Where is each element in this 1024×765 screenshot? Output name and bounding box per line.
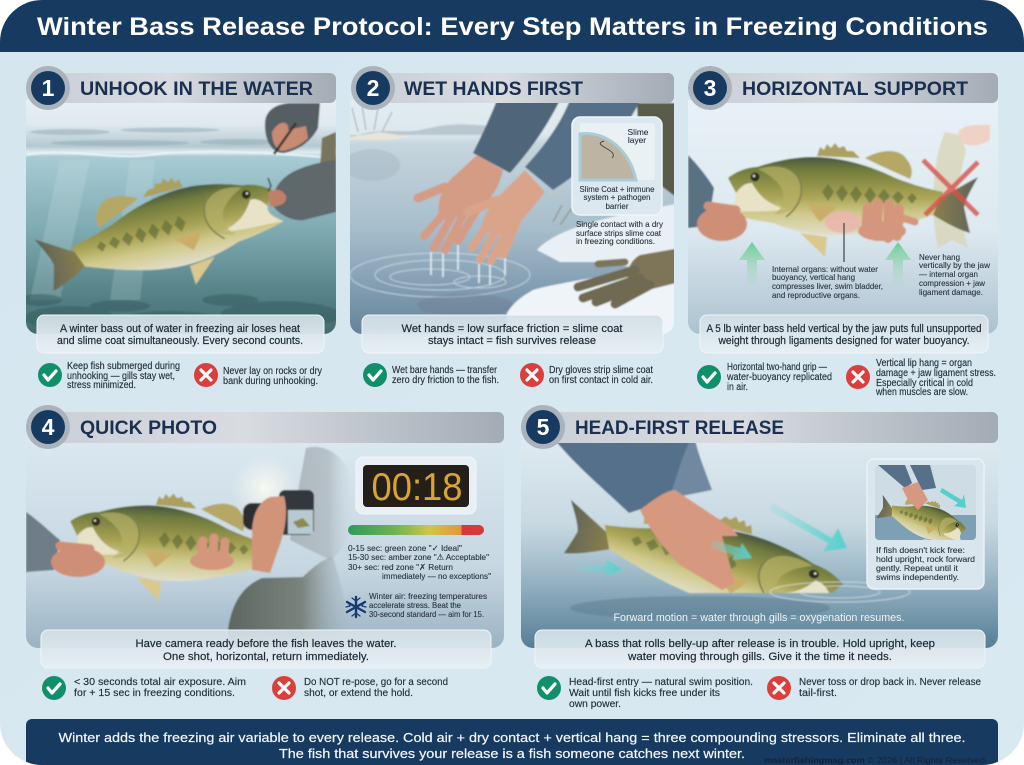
don't item [846, 358, 996, 398]
text band: and slime coat simultaneously. Every second counts. [57, 335, 303, 347]
don't item: damage + jaw ligament stress. [876, 368, 996, 379]
stress gauge bar [348, 525, 484, 535]
do item: Horizontal two-hand grip — [727, 362, 827, 373]
icon: snowflake [346, 597, 366, 617]
heading: 4 [42, 414, 55, 440]
annotation: internal organs: Internal organs: without water [772, 264, 878, 274]
inset: slime layer diagram [572, 117, 662, 215]
text band: stays intact = fish survives release [428, 335, 596, 347]
do item: Keep fish submerged during [67, 361, 180, 372]
annotation: never hang: — internal organ [919, 269, 978, 279]
text band: weight through ligaments designed for water buoyancy. [718, 335, 970, 347]
heading: WET HANDS FIRST [404, 78, 583, 100]
text band [362, 315, 663, 353]
do item: in air. [727, 382, 748, 393]
inset: if fish doesn't kick free: hold upright, rock forward [876, 554, 975, 564]
footer banner: The fish that survives your release is a fish someone catches next winter. [279, 746, 745, 761]
arrow: buoyancy support right [885, 242, 911, 287]
text band [700, 315, 988, 353]
don't item: Do NOT re-pose, go for a second [304, 677, 448, 688]
callout: dry contact: surface strips slime coat [576, 228, 662, 238]
gauge legend: immediately — no exceptions" [382, 571, 491, 581]
inset: if fish doesn't kick free [867, 459, 984, 589]
do item: for + 15 sec in freezing conditions. [74, 688, 235, 699]
do item [697, 362, 832, 393]
do item [42, 676, 246, 700]
gauge legend [348, 543, 491, 581]
do item: Head-first entry — natural swim position. [569, 677, 753, 688]
watermark: masterfishingmag.com © 2026 | All Rights Reserved [764, 755, 985, 765]
callout: dry contact: in freezing conditions. [576, 236, 655, 246]
inset: slime layer diagram: Slime [628, 127, 649, 137]
title bar [0, 0, 1024, 52]
text band: One shot, horizontal, return immediately. [163, 651, 369, 663]
annotation: never hang: ligament damage. [919, 287, 983, 297]
title bar: Winter Bass Release Protocol: Every Step Matters in Freezing Conditions [37, 13, 988, 41]
do item [38, 361, 180, 391]
annotation: never hang: compression + jaw [919, 278, 986, 288]
winter air note [369, 591, 487, 619]
do item [537, 676, 753, 710]
gauge legend: 30+ sec: red zone "✗ Return [348, 562, 453, 572]
text band [535, 630, 985, 668]
annotation: internal organs: buoyancy, vertical hang [772, 272, 855, 282]
inset: slime layer diagram: barrier [606, 201, 629, 211]
text band: water moving through gills. Give it the time it needs. [627, 651, 892, 663]
timer display [356, 457, 476, 514]
don't item: Vertical lip hang = organ [876, 358, 972, 369]
don't item [520, 363, 653, 387]
winter air note: Winter air: freezing temperatures [369, 591, 487, 601]
heading: 1 [42, 75, 55, 101]
don't item: Never toss or drop back in. Never release [799, 677, 982, 688]
don't item: Never lay on rocks or dry [223, 366, 322, 377]
inset: slime layer diagram: system + pathogen [584, 192, 651, 202]
don't item [194, 363, 322, 387]
footer banner: Winter adds the freezing air variable to every release. Cold air + dry contact + vertical hang = three compounding stressors. Eliminate all three. [58, 730, 966, 745]
annotation: internal organs [772, 264, 883, 300]
do item: Wait until fish kicks free under its [569, 688, 720, 699]
panel 2: wet hands first [344, 66, 680, 387]
don't item: when muscles are slow. [875, 387, 968, 398]
do item [363, 363, 499, 387]
gauge legend: 15-30 sec: amber zone "⚠ Acceptable" [348, 552, 489, 562]
inset: slime layer diagram: layer [628, 135, 646, 145]
annotation: never hang: Never hang [919, 252, 960, 262]
arrow: buoyancy support left [739, 242, 765, 287]
text band [37, 315, 324, 353]
do item: < 30 seconds total air exposure. Aim [74, 677, 246, 688]
don't item: bank during unhooking. [223, 376, 318, 387]
heading: 5 [537, 414, 550, 440]
panel 3: horizontal support [682, 66, 1004, 398]
text band: A 5 lb winter bass held vertical by the jaw puts full unsupported [706, 323, 982, 335]
gauge legend: 0-15 sec: green zone "✓ Ideal" [348, 543, 462, 553]
winter air note: accelerate stress. Beat the [369, 600, 461, 610]
annotation: internal organs: and reproductive organs. [772, 290, 860, 300]
inset: if fish doesn't kick free: gently. Repeat until it [876, 563, 959, 573]
callout: dry contact: Single contact with a dry [576, 219, 664, 229]
illustration: bass photo with camera [26, 446, 504, 648]
text band: A winter bass out of water in freezing air loses heat [60, 323, 300, 335]
annotation: never hang: vertically by the jaw [919, 260, 991, 270]
do item: water-buoyancy replicated [726, 372, 832, 383]
heading: 3 [704, 75, 716, 101]
illustration: underwater bass being unhooked [18, 95, 342, 340]
don't item: tail-first. [799, 688, 837, 699]
do item: zero dry friction to the fish. [392, 375, 499, 386]
don't item: Dry gloves strip slime coat [549, 365, 653, 376]
panel 1: unhook in the water [18, 66, 342, 391]
heading [521, 405, 998, 449]
heading: 2 [367, 75, 379, 101]
heading [26, 66, 336, 110]
text band: A bass that rolls belly-up after release is in trouble. Hold upright, keep [585, 638, 935, 650]
panel 4: quick photo [20, 405, 510, 700]
footer banner [26, 719, 998, 765]
heading: HEAD-FIRST RELEASE [575, 417, 784, 439]
caption: forward motion: Forward motion = water through gills = oxygenation resumes. [614, 612, 904, 624]
do item: unhooking — gills stay wet, [67, 371, 175, 382]
inset: if fish doesn't kick free: swims independently. [876, 572, 959, 582]
text band: Wet hands = low surface friction = slime coat [402, 323, 622, 335]
inset: if fish doesn't kick free: If fish doesn't kick free: [876, 545, 965, 555]
annotation: never hang [919, 252, 991, 297]
illustration: wet hands over water [344, 95, 680, 340]
don't item [272, 676, 448, 700]
heading: UNHOOK IN THE WATER [80, 78, 313, 100]
don't item: Especially critical in cold [876, 378, 973, 389]
timer display: 00:18 [372, 466, 462, 509]
heading: QUICK PHOTO [80, 417, 217, 439]
heading [26, 405, 504, 449]
illustration: releasing bass head first [521, 443, 998, 648]
don't item: on first contact in cold air. [549, 375, 653, 386]
text band: Have camera ready before the fish leaves the water. [136, 638, 396, 650]
callout: dry contact [576, 219, 664, 246]
heading [688, 66, 998, 110]
heading: HORIZONTAL SUPPORT [742, 78, 968, 100]
don't item: shot, or extend the hold. [304, 688, 413, 699]
winter air note: 30-second standard — aim for 15. [369, 609, 484, 619]
illustration: two-hand horizontal grip [682, 95, 1004, 340]
text band [41, 630, 491, 668]
heading [351, 66, 674, 110]
do item: stress minimized. [67, 380, 136, 391]
panel 5: head-first release [515, 405, 1004, 710]
do item: Wet bare hands — transfer [392, 365, 498, 376]
do item: own power. [569, 699, 621, 710]
don't item [767, 676, 982, 700]
inset: slime layer diagram: Slime Coat + immune [580, 184, 655, 194]
annotation: internal organs: compresses liver, swim bladder, [772, 281, 883, 291]
